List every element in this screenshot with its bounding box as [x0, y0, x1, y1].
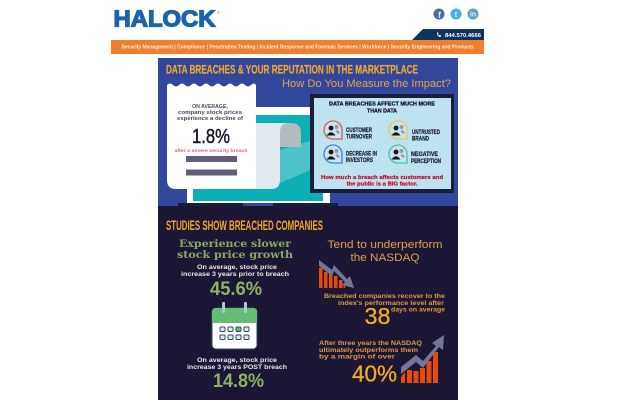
decrease in investors: DECREASE IN [346, 150, 377, 158]
statistic: 1.8% [192, 126, 230, 148]
paper roll [256, 123, 301, 189]
sign: data breaches affect more [310, 94, 454, 193]
panel: studies: increase 3 years prior to breach [181, 272, 289, 278]
customer turnover: TURNOVER [346, 134, 372, 140]
panel: studies: the NASDAQ [350, 252, 420, 264]
panel: studies: by a margin of over [319, 354, 396, 360]
receipt text: ON AVERAGE, [192, 104, 228, 110]
title: DATA BREACHES & YOUR REPUTATION IN THE MARKETPLACE [166, 62, 418, 76]
icon: facebook [434, 8, 444, 20]
sign: data breaches affect more: the public is a BIG factor. [346, 182, 418, 188]
icon: calendar [212, 302, 257, 349]
negative perception [389, 145, 441, 165]
icon: linkedin: in [470, 12, 476, 18]
statistic: 40%: 40% [352, 360, 397, 386]
untrusted brand [389, 121, 440, 142]
statistic: 14.8%: 14.8% [213, 370, 264, 392]
sign footnote: How much a breach affects customers and [321, 175, 443, 181]
phone tab: 844.570.4666 [445, 33, 481, 39]
icon: facebook: f [438, 10, 442, 20]
phone tab [412, 29, 484, 40]
untrusted brand: BRAND [412, 136, 429, 142]
panel: studies: stock price growth [177, 249, 293, 261]
negative perception: PERCEPTION [411, 158, 441, 165]
panel: studies [158, 206, 458, 400]
icon: rising chart [401, 335, 444, 383]
logo: ® [217, 10, 220, 15]
recovery text: Breached companies recover to the [324, 294, 446, 300]
screen illustration [178, 107, 338, 206]
logo: HALOCK [114, 6, 216, 32]
receipt caption: after a severe security breach [174, 148, 248, 154]
sign heading: DATA BREACHES AFFECT MUCH MORE [329, 102, 435, 108]
receipt [167, 84, 301, 189]
icon: linkedin [468, 8, 478, 20]
decrease in investors: INVESTORS [346, 157, 374, 164]
icon: falling chart [319, 260, 354, 288]
panel: reputation [158, 58, 458, 206]
customer turnover [324, 121, 372, 140]
panel: studies: index's performance level after [338, 301, 445, 307]
prior text: On average, stock price [197, 265, 278, 271]
untrusted brand: UNTRUSTED [412, 129, 440, 136]
left heading: Experience slower [179, 238, 291, 250]
receipt: experience a decline of [177, 116, 243, 122]
negative perception: NEGATIVE [411, 151, 439, 158]
subtitle: How Do You Measure the Impact? [282, 78, 451, 90]
panel: studies: increase 3 years POST breach [187, 365, 287, 371]
icon: twitter [450, 8, 462, 20]
post text: On average, stock price [197, 358, 278, 364]
customer turnover: CUSTOMER [346, 127, 372, 134]
outperform text: After three years the NASDAQ [319, 341, 422, 347]
section heading: STUDIES SHOW BREACHED COMPANIES [166, 217, 323, 233]
navigation bar [111, 40, 484, 54]
navigation bar: Security Management | Compliance | Penetration Testing | Incident Response and Forensic Services | Workforce | Security Engineering and Products [122, 44, 474, 50]
right heading: Tend to underperform [328, 239, 442, 251]
decrease in investors [324, 145, 377, 164]
header [111, 6, 484, 54]
icon: twitter: t [455, 10, 458, 19]
statistic: 38: 38 [364, 303, 390, 329]
sign: data breaches affect more: THAN DATA [367, 108, 397, 114]
receipt: company stock prices [178, 110, 242, 116]
panel: studies: days on average [391, 308, 446, 314]
panel: studies: ultimately outperforms them [319, 348, 418, 354]
statistic: 45.6%: 45.6% [210, 278, 262, 300]
